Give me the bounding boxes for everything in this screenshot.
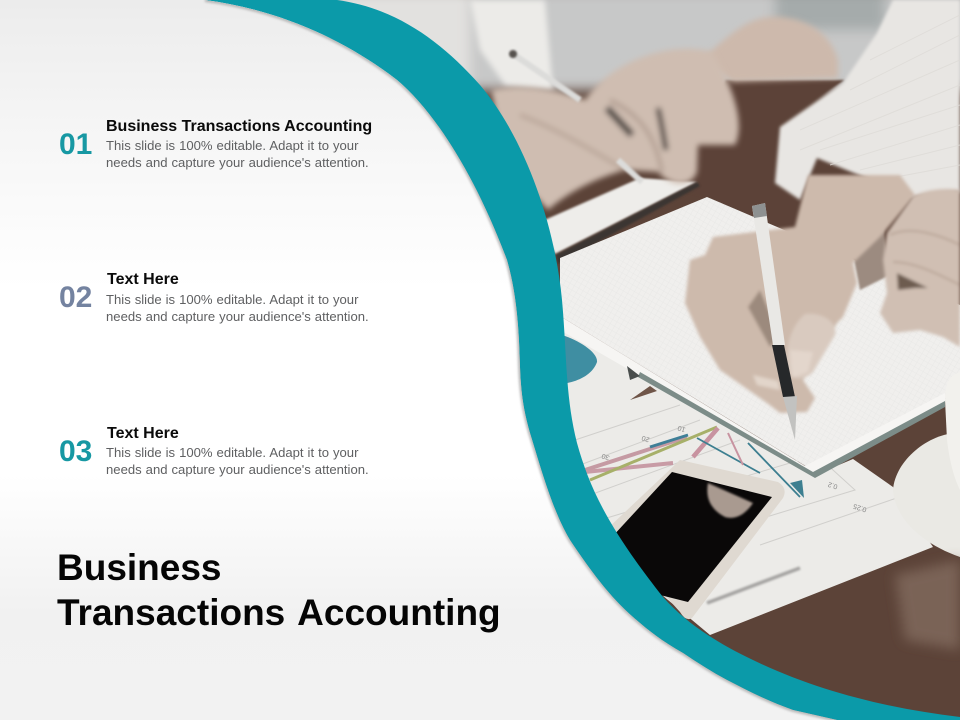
wood reflection — [895, 560, 960, 650]
item 03 body: needs and capture your audience's attention. — [106, 462, 369, 477]
dark wood — [680, 80, 845, 235]
title: Transactions Accounting — [57, 592, 501, 633]
title: Business — [57, 547, 222, 588]
item 03 body — [106, 445, 369, 477]
teal wave — [205, 0, 960, 720]
item 03 body: This slide is 100% editable. Adapt it to your — [106, 445, 358, 460]
chart tick labels: 20 — [641, 434, 651, 443]
item 01 body: This slide is 100% editable. Adapt it to your — [106, 138, 358, 153]
wave edge shadow — [205, 0, 837, 720]
item 01 heading: Business Transactions Accounting — [106, 118, 372, 135]
blurred caption on paper — [707, 568, 800, 603]
title — [57, 547, 501, 633]
item 02 — [59, 271, 369, 324]
item 02 body — [106, 292, 369, 324]
teal pie on paper — [562, 335, 597, 384]
chart tick labels: 10 — [677, 424, 687, 433]
chart tick labels: 30 — [601, 452, 611, 461]
item 02 body: needs and capture your audience's attention. — [106, 309, 369, 324]
chart — [575, 405, 920, 545]
main notebook — [560, 197, 960, 478]
item 02 body: This slide is 100% editable. Adapt it to your — [106, 292, 358, 307]
upper notebook — [540, 178, 697, 254]
right hand — [880, 189, 960, 347]
item 03 — [59, 425, 369, 477]
centre hand — [685, 175, 915, 413]
item 02 heading: Text Here — [107, 271, 179, 288]
item 01 body: needs and capture your audience's attention. — [106, 155, 369, 170]
chart tick labels: 0.25 — [852, 502, 868, 513]
grey shirt backdrop — [330, 0, 960, 100]
item 01 — [59, 118, 372, 170]
item 01 body — [106, 138, 369, 170]
number 03: 03 — [59, 435, 92, 468]
number 01: 01 — [59, 128, 92, 161]
paper with chart — [555, 320, 933, 635]
upper arm — [700, 17, 838, 82]
chart tick labels — [601, 424, 868, 513]
striped sweater — [775, 0, 960, 200]
left hand — [492, 49, 739, 210]
item 03 heading: Text Here — [107, 425, 179, 442]
photo: desk scene — [330, 0, 960, 720]
dark wedge under notebook — [630, 386, 657, 400]
white sleeve left — [470, 0, 553, 90]
dark gap by wrist — [853, 225, 890, 290]
chart tick labels: 0.2 — [827, 480, 839, 490]
blurred pen, left hand — [513, 54, 642, 182]
phone — [606, 460, 785, 619]
number 02: 02 — [59, 281, 92, 314]
saucer and cup — [893, 372, 960, 557]
pen in centre hand — [752, 203, 797, 440]
